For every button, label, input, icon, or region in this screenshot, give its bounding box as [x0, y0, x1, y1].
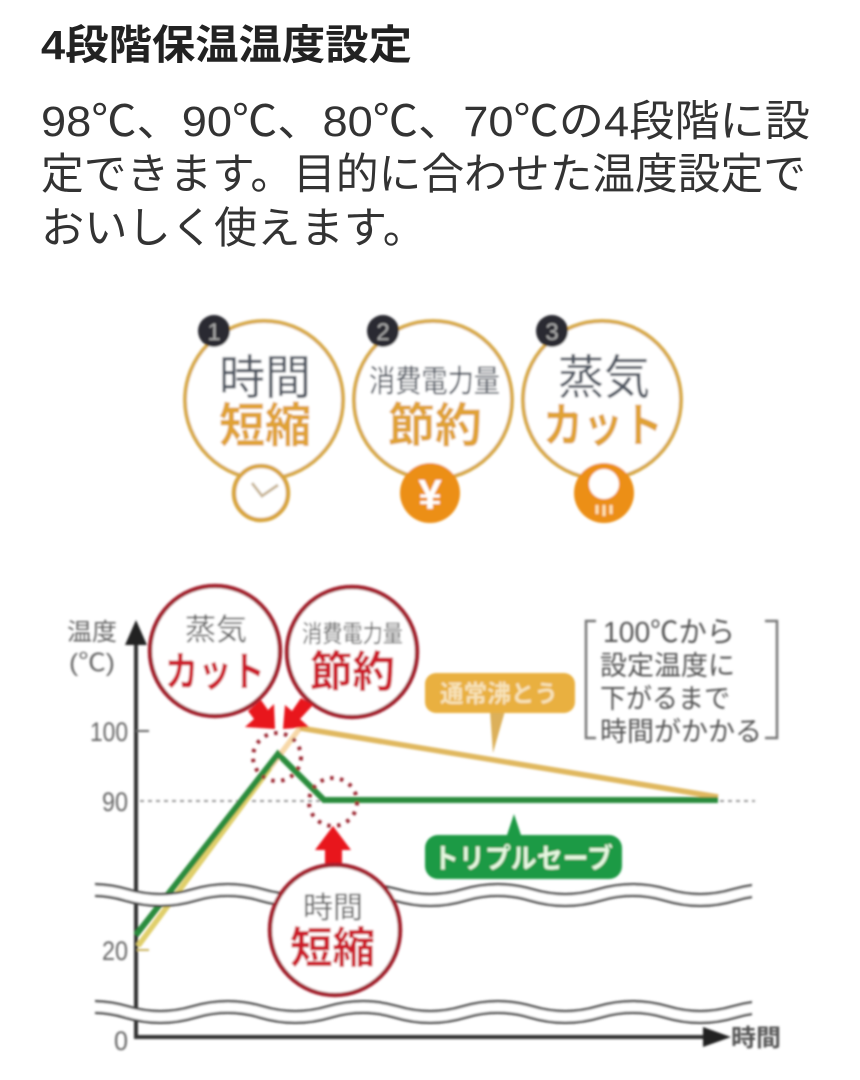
chart: temperature over time — [59, 586, 802, 1056]
dotted circles — [253, 733, 357, 826]
benefit 3: steam cut: カット — [543, 399, 663, 452]
line: triple save — [136, 754, 718, 935]
benefit 3: steam cut — [523, 315, 681, 523]
annotation: bracket note: 下がるまで — [600, 684, 730, 714]
callout: steam cut: 蒸気 — [185, 614, 247, 647]
callout: power saving — [287, 587, 417, 717]
benefit 1: time reduction: 1 — [207, 319, 221, 346]
body text — [41, 98, 810, 253]
callout: power saving: 消費電力量 — [302, 621, 403, 648]
axes — [125, 620, 731, 1047]
panel: three benefits — [185, 315, 681, 523]
label: ordinary kettle: 通常沸とう — [440, 681, 558, 708]
label: triple save — [425, 814, 622, 879]
axis labels: (℃) — [69, 649, 115, 677]
arrow: to peak from right — [283, 698, 313, 729]
benefit 2: power saving: 消費電力量 — [369, 364, 500, 399]
line: ordinary kettle — [138, 728, 718, 946]
annotation: bracket note: 100℃から — [603, 617, 735, 649]
body text: 定できます。目的に合わせた温度設定で — [41, 151, 806, 199]
axis labels — [67, 619, 781, 1056]
benefit 2: power saving: ¥ — [418, 471, 442, 518]
annotation: bracket note: 設定温度に — [600, 651, 735, 681]
label: triple save: トリプルセーブ — [433, 842, 613, 874]
callout: time reduction: 時間 — [303, 892, 363, 925]
axis labels: 0 — [114, 1026, 128, 1056]
label: ordinary kettle — [425, 673, 575, 753]
benefit 2: power saving: 2 — [376, 319, 390, 346]
axis labels: 90 — [102, 787, 128, 817]
benefit 1: time reduction — [185, 315, 343, 520]
annotation: bracket note: 時間がかかる — [600, 717, 762, 747]
body text: 98℃、90℃、80℃、70℃の4段階に設 — [41, 98, 810, 146]
benefit 3: steam cut: 蒸気 — [558, 351, 650, 404]
annotation: bracket note — [586, 617, 777, 747]
axis labels: 温度 — [67, 619, 117, 646]
title: 4段階保温温度設定 — [41, 22, 412, 68]
benefit 1: time reduction: 時間 — [219, 351, 311, 404]
benefit 3: steam cut: 3 — [545, 319, 559, 346]
benefit 2: power saving — [354, 315, 512, 523]
axis labels: 時間 — [731, 1025, 781, 1052]
axis labels: 100 — [90, 717, 128, 747]
callout: time reduction — [270, 826, 400, 995]
benefit 2: power saving: 節約 — [388, 399, 482, 452]
callout: steam cut — [150, 586, 280, 716]
body text: おいしく使えます。 — [41, 205, 426, 253]
axis break waves — [59, 890, 802, 1017]
90 degree dashed line — [140, 800, 755, 802]
callout: time reduction: 短縮 — [290, 925, 375, 973]
arrow: to peak from left — [245, 700, 275, 729]
callout: steam cut: カット — [165, 649, 265, 695]
axis labels: 20 — [102, 936, 128, 966]
callout: power saving: 節約 — [310, 649, 395, 697]
benefit 1: time reduction: 短縮 — [219, 399, 311, 452]
